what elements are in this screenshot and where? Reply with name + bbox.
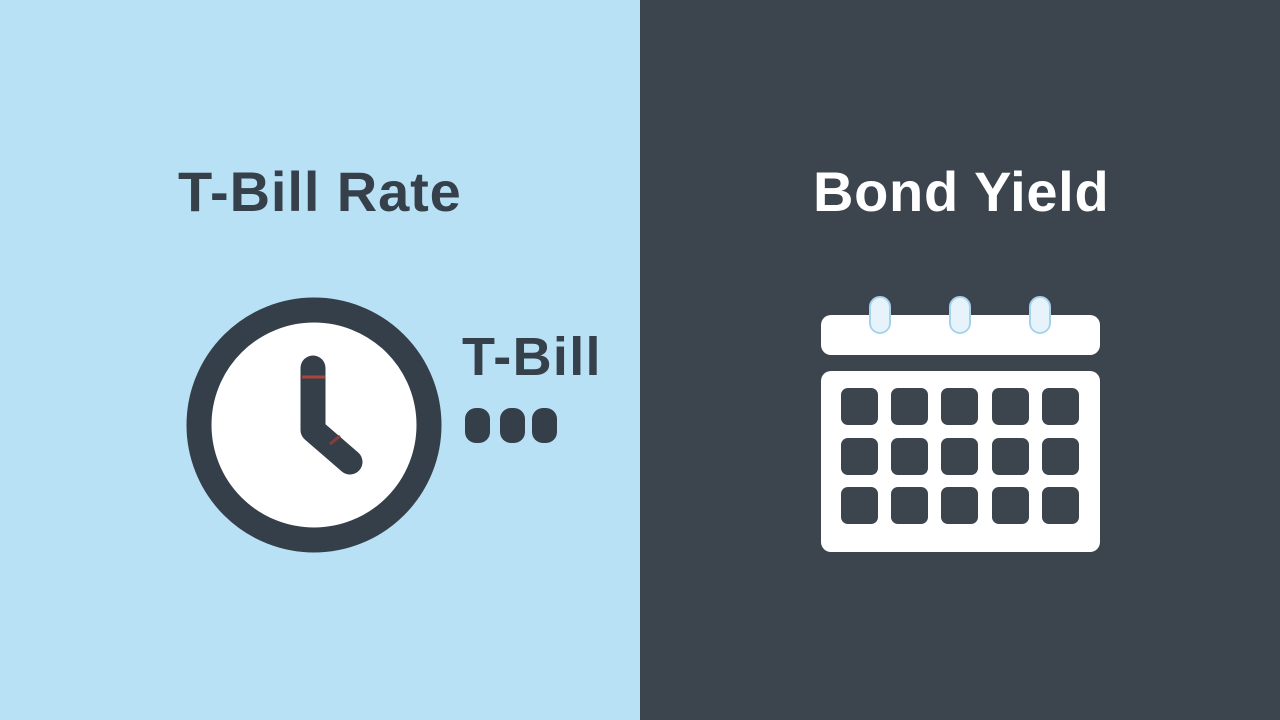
icon: calendar: [821, 296, 1100, 552]
panel: left T-Bill: [0, 0, 640, 720]
title: T-Bill Rate: T-Bill Rate: [178, 160, 462, 223]
title: Bond Yield: Bond Yield: [813, 160, 1109, 223]
icon: clock: [186, 298, 442, 552]
icon: three dots: [465, 408, 557, 443]
panel: right Bond: [640, 0, 1280, 720]
label: T-Bill: T-Bill: [462, 327, 602, 387]
